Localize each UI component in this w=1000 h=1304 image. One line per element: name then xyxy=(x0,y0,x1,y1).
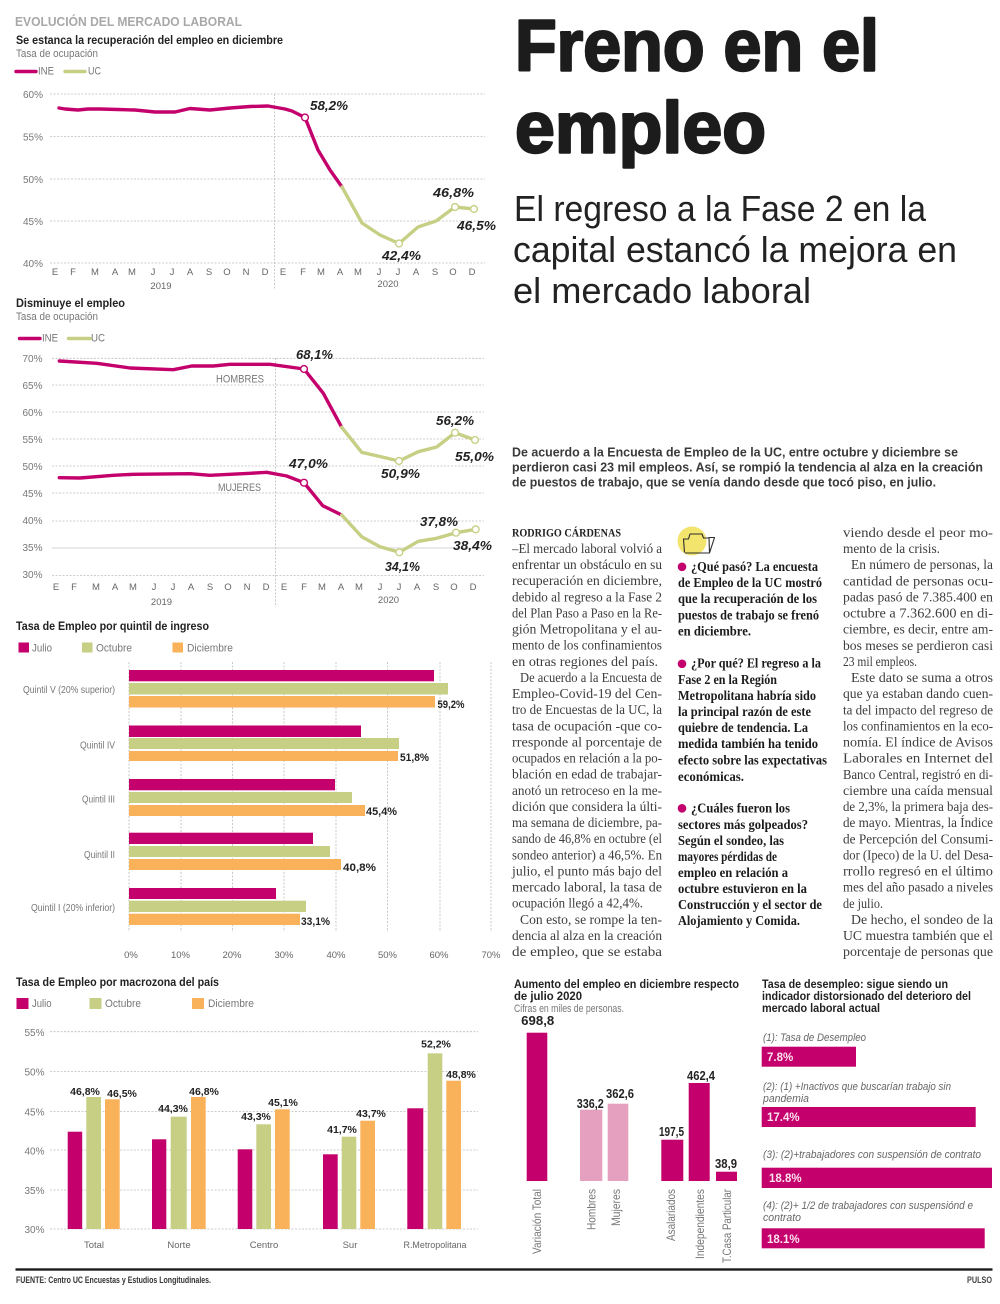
panel: line chart overall employment rate: A xyxy=(112,267,119,278)
key point: por qué: Metropolitana habría sido xyxy=(678,688,816,703)
panel: bar chart employment increase: Cifras en miles de personas. xyxy=(514,1003,624,1015)
lead paragraph xyxy=(512,444,983,490)
bar 1: (1): Tasa de Desempleo xyxy=(763,1032,866,1044)
legend xyxy=(18,642,233,654)
bars: total xyxy=(68,1086,138,1229)
panel: bar chart by macrozone: 55% xyxy=(24,1028,45,1039)
panel: line chart employment by gender: D xyxy=(263,582,270,593)
panel: line chart overall employment rate: J xyxy=(151,267,156,278)
text block: article column 1: sando de 46,8% en octubre (el xyxy=(512,831,662,846)
panel: line chart overall employment rate: A xyxy=(187,267,194,278)
panel: bar chart by income quintile: 10% xyxy=(171,950,191,961)
key point: por qué: económicas. xyxy=(678,769,744,784)
panel: line chart employment by gender: 2019 xyxy=(151,597,172,608)
panel: bar chart by macrozone: Centro xyxy=(250,1240,278,1251)
panel: line chart employment by gender: 65% xyxy=(22,381,43,392)
line: INE xyxy=(59,106,342,187)
panel: line chart employment by gender: M xyxy=(318,582,326,593)
bar: t. casa particular: 38,9 xyxy=(715,1157,737,1171)
panel: line chart employment by gender: F xyxy=(301,582,307,593)
panel: line chart employment by gender: A xyxy=(188,582,195,593)
text block: article column 3: padas pasó de 7.385.400 en xyxy=(843,590,993,604)
value markers: 50,9% xyxy=(381,466,420,481)
text block: article column 1: blación en edad de trabajar- xyxy=(512,767,662,782)
text block: article column 3: de julio. xyxy=(843,896,883,911)
panel: line chart employment by gender xyxy=(16,296,494,608)
legend xyxy=(16,998,254,1010)
bars: norte: 44,3% xyxy=(158,1103,189,1115)
panel: line chart employment by gender: 30% xyxy=(22,570,43,581)
panel: line chart overall employment rate: O xyxy=(223,267,231,278)
bar 4: contrato xyxy=(763,1212,801,1224)
bar: independientes: 462,4 xyxy=(687,1069,715,1083)
panel: line chart overall employment rate: F xyxy=(300,267,306,278)
text block: article column 3: En número de personas, la xyxy=(851,557,993,572)
value markers: 38,4% xyxy=(453,538,492,553)
bar: hombres: 336,2 xyxy=(577,1097,604,1111)
panel: bar chart by income quintile: 30% xyxy=(274,950,294,961)
legend: Octubre xyxy=(96,642,132,654)
line: hombres INE xyxy=(59,361,342,427)
panel: bar chart by macrozone: Total xyxy=(84,1240,104,1251)
panel: line chart employment by gender: J xyxy=(171,582,176,593)
panel: bar chart by income quintile: 0% xyxy=(124,950,138,961)
bars: sur: 43,7% xyxy=(356,1108,387,1120)
panel: line chart employment by gender: O xyxy=(450,582,458,593)
text block: article column 3: mes del año pasado a niveles xyxy=(843,880,993,895)
key point: por qué: Fase 2 en la Región xyxy=(678,672,777,687)
text block: article column 3: ta del impacto del regreso de xyxy=(843,702,993,717)
panel: bar chart by income quintile: 70% xyxy=(481,950,501,961)
line: UC xyxy=(342,187,474,244)
legend: Julio xyxy=(32,642,52,654)
bar 4: (4): (2)+ 1/2 de trabajadores con suspensiónd e xyxy=(763,1200,973,1212)
text block: article column 3 xyxy=(843,525,994,959)
legend: Octubre xyxy=(105,998,141,1010)
legend: INE xyxy=(38,66,54,78)
panel: line chart employment by gender: Disminuye el empleo xyxy=(16,296,125,310)
bars: R. Metropolitana: 48,8% xyxy=(446,1069,477,1081)
bar: variación total: Variación Total xyxy=(530,1189,544,1254)
source: FUENTE: Centro UC Encuestas y Estudios Longitudinales. xyxy=(16,1275,211,1285)
text block: article column 3: mento de la crisis. xyxy=(843,541,940,556)
key point: qué pasó: de Empleo de la UC mostró xyxy=(678,575,822,590)
panel: line chart employment by gender: 70% xyxy=(22,354,43,365)
text block: article column 3: cantidad de personas ocu- xyxy=(843,573,994,588)
text block: article column 3: viendo desde el peor mo- xyxy=(843,525,994,540)
bars: sur xyxy=(323,1108,387,1229)
value markers: 58,2% xyxy=(310,98,348,113)
text block: article column 3: de mayo. Mientras, la Índice xyxy=(843,815,993,830)
key point: cuáles fueron los sectores: Según el sondeo, las xyxy=(678,833,784,848)
bar: hombres: Hombres xyxy=(584,1189,598,1230)
panel: bar chart by macrozone: 45% xyxy=(24,1108,45,1118)
value markers: 37,8% xyxy=(420,514,458,529)
series labels: MUJERES xyxy=(218,482,261,494)
bars: quintil V: 59,2% xyxy=(438,699,465,711)
text block: article column 1: gión Metropolitana y el au- xyxy=(512,622,663,637)
legend: Julio xyxy=(32,998,52,1010)
panel: line chart overall employment rate: N xyxy=(243,267,250,278)
panel: bar chart by income quintile: Quintil I (20% inferior) xyxy=(31,903,115,914)
panel: unemployment rate: mercado laboral actual xyxy=(762,1001,880,1015)
key point: por qué: quiebre de tendencia. La xyxy=(678,720,808,735)
bars: total: 46,5% xyxy=(107,1088,138,1100)
bar 1: 7.8% xyxy=(767,1052,793,1064)
panel: bar chart by macrozone: Norte xyxy=(167,1240,191,1251)
bars: norte xyxy=(152,1086,220,1229)
key point: cuáles fueron los sectores xyxy=(678,800,822,928)
panel: line chart employment by gender: 40% xyxy=(22,516,43,527)
key point: cuáles fueron los sectores: empleo en relación a xyxy=(678,865,788,880)
key point: qué pasó: puestos de trabajo se frenó xyxy=(678,608,819,622)
value markers: 47,0% xyxy=(288,456,328,471)
bar: asalariados: Asalariados xyxy=(664,1189,678,1241)
text block: article column 1: debido al regreso a la Fase 2 xyxy=(512,589,662,604)
panel: unemployment rate: Tasa de desempleo: sigue siendo un xyxy=(762,977,948,991)
panel: line chart employment by gender: M xyxy=(92,582,100,593)
panel: line chart employment by gender: A xyxy=(414,582,421,593)
bars: quintil III xyxy=(129,779,397,818)
panel: line chart employment by gender: A xyxy=(338,582,345,593)
bars: centro xyxy=(238,1097,299,1229)
text block: article column 1: De acuerdo a la Encuesta de xyxy=(520,670,662,685)
panel: line chart employment by gender: E xyxy=(53,582,59,593)
text block: article column 3: que ya estaban dando cuen- xyxy=(843,686,994,701)
bar 2: (2): (1) +Inactivos que buscarían trabajo sin xyxy=(763,1081,951,1093)
text block: article column 3: rrollo regresó en el último xyxy=(843,864,993,878)
bars: R. Metropolitana xyxy=(407,1038,477,1229)
panel: line chart employment by gender: M xyxy=(129,582,137,593)
credit: PULSO xyxy=(967,1275,992,1285)
panel: bar chart by income quintile: 40% xyxy=(326,950,346,961)
key point: por qué: ¿Por qué? El regreso a la xyxy=(691,656,821,671)
text block: article column 3: Este dato se suma a otros xyxy=(851,670,993,685)
bars: sur: 41,7% xyxy=(327,1124,358,1136)
text block: article column 3: de Percepción del Consumi- xyxy=(843,831,993,846)
lead paragraph: De acuerdo a la Encuesta de Empleo de la UC, entre octubre y diciembre se xyxy=(512,444,958,460)
bars: quintil IV: 51,8% xyxy=(400,752,429,764)
legend xyxy=(20,332,105,344)
bars: quintil I: 33,1% xyxy=(301,916,330,928)
panel: line chart employment by gender: M xyxy=(355,582,363,593)
panel: bar chart by income quintile: Quintil III xyxy=(82,794,115,806)
legend: Diciembre xyxy=(208,998,254,1010)
key point: qué pasó: que la recuperación de los xyxy=(678,591,817,606)
panel: bar chart by macrozone: Tasa de Empleo por macrozona del país xyxy=(16,975,219,989)
key point: cuáles fueron los sectores: mayores pérdidas de xyxy=(678,849,777,864)
panel: line chart overall employment rate: F xyxy=(70,267,76,278)
value markers: 42,4% xyxy=(381,248,421,263)
lead paragraph: de puestos de trabajo, que se venía dando desde que tocó piso, en julio. xyxy=(512,474,936,490)
text block: article column 1: mercado laboral, la tasa de xyxy=(512,880,662,894)
text block: article column 1: del Plan Paso a Paso en la Re- xyxy=(512,606,662,620)
panel: line chart overall employment rate: Se estanca la recuperación del empleo en diciembre xyxy=(16,33,283,47)
panel: line chart employment by gender: 55% xyxy=(22,435,43,446)
panel: line chart overall employment rate: 60% xyxy=(23,90,43,101)
lead paragraph: perdieron casi 23 mil empleos. Así, se rompió la tendencia al alza en la creación xyxy=(512,460,983,474)
panel: bar chart by macrozone xyxy=(16,975,478,1251)
bars: quintil I xyxy=(129,888,330,928)
panel: line chart employment by gender: 50% xyxy=(22,462,43,473)
value markers: 34,1% xyxy=(385,559,420,574)
line: mujeres INE xyxy=(59,472,342,515)
bar: mujeres: 362,6 xyxy=(606,1087,634,1101)
panel: line chart overall employment rate: M xyxy=(91,267,99,278)
text block: article column 3: octubre a 7.362.600 en di- xyxy=(843,606,994,621)
panel: line chart employment by gender: A xyxy=(112,582,119,593)
bars: quintil II: 40,8% xyxy=(343,862,376,874)
panel: line chart overall employment rate: 55% xyxy=(23,132,43,144)
panel: line chart employment by gender: D xyxy=(470,582,477,593)
panel: line chart employment by gender: S xyxy=(207,582,213,593)
panel: line chart overall employment rate: D xyxy=(469,267,476,278)
text block: article column 3: Laborales en Internet del xyxy=(843,751,993,766)
text block: article column 3: de 2,3%, la primera baja des- xyxy=(843,799,993,814)
headline: Freno en el xyxy=(515,6,879,86)
panel: bar chart by macrozone: 30% xyxy=(24,1225,45,1236)
bar 2 xyxy=(762,1081,976,1127)
text block: article column 3: UC muestra también que el xyxy=(843,928,993,943)
text block: article column 1 xyxy=(511,541,663,959)
legend: Diciembre xyxy=(187,642,233,654)
panel: line chart employment by gender: N xyxy=(244,582,251,593)
panel: bar chart by income quintile: 50% xyxy=(378,950,398,961)
value markers xyxy=(302,98,496,263)
panel: line chart overall employment rate: 2019 xyxy=(150,281,172,292)
panel: line chart employment by gender: Tasa de ocupación xyxy=(16,311,98,323)
bars: total: 46,8% xyxy=(70,1086,101,1098)
key point: por qué xyxy=(678,656,827,784)
panel: line chart employment by gender: 35% xyxy=(22,543,43,554)
icon: yellow circle with folder xyxy=(678,526,714,556)
bar: mujeres: Mujeres xyxy=(609,1189,623,1226)
value markers: 68,1% xyxy=(296,347,333,362)
key point: qué pasó xyxy=(678,559,822,638)
bar: t. casa particular: T.Casa Particular xyxy=(720,1189,734,1263)
bar 1 xyxy=(762,1032,866,1067)
panel: line chart overall employment rate: E xyxy=(280,267,286,278)
text block: article column 3: los confinamientos en la eco- xyxy=(843,718,993,733)
bars: norte: 46,8% xyxy=(189,1086,220,1098)
panel: line chart overall employment rate: M xyxy=(354,267,362,278)
text block: article column 3: dor (Ipeco) de la U. del Desa- xyxy=(843,847,993,862)
text block: article column 3: porcentaje de personas que xyxy=(843,944,993,959)
bar: asalariados: 197,5 xyxy=(659,1125,684,1139)
panel: line chart overall employment rate: 40% xyxy=(23,259,43,270)
text block: article column 1: ma semana de diciembre, pa- xyxy=(512,815,662,830)
section label: evolución del mercado laboral: EVOLUCIÓN DEL MERCADO LABORAL xyxy=(15,14,242,29)
key point: cuáles fueron los sectores: ¿Cuáles fueron los xyxy=(691,800,790,816)
panel: bar chart by income quintile xyxy=(16,619,501,961)
panel: line chart overall employment rate: D xyxy=(262,267,269,278)
bar 3 xyxy=(762,1149,992,1188)
bar: hombres xyxy=(577,1097,604,1230)
bar 3: 18.8% xyxy=(769,1173,802,1185)
panel: bar chart by macrozone: 35% xyxy=(24,1186,45,1197)
key point: por qué: la principal razón de este xyxy=(678,704,811,719)
bars: centro: 45,1% xyxy=(268,1097,299,1109)
bar 4 xyxy=(762,1200,985,1248)
bar: variación total xyxy=(521,1014,554,1254)
panel: bar chart employment increase: de julio 2020 xyxy=(514,989,582,1003)
panel: line chart overall employment rate: E xyxy=(52,267,58,278)
panel: line chart overall employment rate: M xyxy=(317,267,325,278)
text block: article column 3: bos meses se perdieron casi xyxy=(843,638,993,653)
panel: bar chart by income quintile: Quintil V (20% superior) xyxy=(23,685,115,696)
bar: asalariados xyxy=(659,1125,684,1241)
panel: line chart overall employment rate: O xyxy=(449,267,457,278)
panel: line chart overall employment rate: A xyxy=(413,267,420,278)
key point: por qué: efecto sobre las expectativas xyxy=(678,752,827,768)
panel: line chart employment by gender: 45% xyxy=(22,489,43,500)
text block: article column 1: ocupación llegó a 42,4%. xyxy=(512,896,643,911)
panel: line chart overall employment rate: 50% xyxy=(23,175,43,186)
text block: article column 3: nomía. El índice de Avisos xyxy=(843,735,993,750)
text block: article column 1: de empleo, que se estaba xyxy=(512,944,662,959)
text block: article column 1: Con esto, se rompe la ten- xyxy=(520,912,663,927)
text block: article column 1: julio, el punto más bajo del xyxy=(511,863,662,878)
text block: article column 1: en otras regiones del país. xyxy=(512,654,658,669)
value markers: 56,2% xyxy=(436,413,474,428)
key point: por qué: medida también ha tenido xyxy=(678,736,818,751)
panel: line chart employment by gender: J xyxy=(378,582,383,593)
panel: bar chart by macrozone: R.Metropolitana xyxy=(404,1240,467,1251)
value markers xyxy=(288,347,494,574)
panel: line chart overall employment rate: M xyxy=(128,267,136,278)
headline: empleo xyxy=(515,88,766,168)
bars: R. Metropolitana: 52,2% xyxy=(421,1038,452,1050)
bar 2: 17.4% xyxy=(767,1112,800,1124)
panel: bar chart by macrozone: 40% xyxy=(24,1146,45,1158)
panel: bar chart by income quintile: Tasa de Empleo por quintil de ingreso xyxy=(16,619,209,633)
value markers: 46,5% xyxy=(456,218,496,233)
bars: centro: 43,3% xyxy=(241,1111,272,1123)
text block: article column 1: tro de Encuestas de la UC, la xyxy=(512,702,662,717)
text block: article column 1: –El mercado laboral volvió a xyxy=(511,541,662,556)
panel: line chart overall employment rate: S xyxy=(432,267,438,278)
panel: unemployment rate xyxy=(762,977,992,1248)
text block: article column 1: ocupados en relación a la po- xyxy=(512,751,662,766)
bar: t. casa particular xyxy=(715,1157,737,1263)
panel: line chart employment by gender: 60% xyxy=(22,408,43,419)
panel: line chart employment by gender: J xyxy=(397,582,402,593)
subheading: capital estancó la mejora en xyxy=(513,229,957,270)
bar 3: (3): (2)+trabajadores con suspensión de contrato xyxy=(763,1149,981,1161)
bar: independientes xyxy=(687,1069,715,1259)
bars: quintil III: 45,4% xyxy=(366,806,397,818)
text block: article column 1: dencia al alza en la creación xyxy=(512,928,662,943)
legend: UC xyxy=(91,332,105,344)
bar: independientes: Independientes xyxy=(693,1189,707,1259)
panel: bar chart employment increase xyxy=(514,977,739,1263)
text block: article column 1: tasa de ocupación -que co- xyxy=(512,718,663,733)
panel: line chart employment by gender: J xyxy=(152,582,157,593)
value markers: 55,0% xyxy=(455,449,494,464)
text block: article column 3: 23 mil empleos. xyxy=(843,654,917,669)
panel: line chart overall employment rate xyxy=(16,33,496,292)
bar: mujeres xyxy=(606,1087,634,1226)
text block: article column 1: anotó un retroceso en la me- xyxy=(512,783,662,798)
key point: cuáles fueron los sectores: sectores más golpeados? xyxy=(678,817,808,832)
headline xyxy=(515,6,879,168)
bar 2: pandemia xyxy=(762,1093,809,1105)
panel: bar chart by income quintile: 20% xyxy=(222,950,242,961)
subheading xyxy=(513,188,957,311)
panel: bar chart by macrozone: 50% xyxy=(24,1068,45,1078)
text block: article column 1: Empleo-Covid-19 del Cen- xyxy=(512,686,663,701)
text block: article column 1: mento de los confinamientos xyxy=(512,638,662,653)
subheading: el mercado laboral xyxy=(513,270,811,311)
panel: line chart overall employment rate: A xyxy=(337,267,344,278)
series labels xyxy=(216,374,264,494)
legend xyxy=(16,66,101,78)
key point: cuáles fueron los sectores: Alojamiento y Comida. xyxy=(678,913,800,928)
line: hombres UC xyxy=(342,427,475,461)
subheading: El regreso a la Fase 2 en la xyxy=(514,188,927,229)
panel: unemployment rate: indicador distorsionado del deterioro del xyxy=(762,989,971,1003)
bars: quintil IV xyxy=(129,726,429,764)
byline: RODRIGO CÁRDENAS xyxy=(512,526,621,540)
series labels: HOMBRES xyxy=(216,374,264,386)
bar 4: 18.1% xyxy=(767,1234,800,1246)
panel: line chart overall employment rate: J xyxy=(170,267,175,278)
bars: quintil V xyxy=(129,670,465,711)
legend: INE xyxy=(42,332,58,344)
text block: article column 1: enfrentar un obstáculo en su xyxy=(512,557,662,572)
text block: article column 3: ciembre, es decir, entre am- xyxy=(843,622,993,637)
panel: line chart overall employment rate: J xyxy=(377,267,382,278)
text block: article column 1: sondeo anterior) a 46,5%. En xyxy=(512,847,662,862)
text block: article column 1: rresponde al porcentaje de xyxy=(512,734,662,749)
panel: line chart employment by gender: S xyxy=(433,582,439,593)
text block: article column 1: dición que considera la últi- xyxy=(512,799,663,814)
key point: cuáles fueron los sectores: octubre estuvieron en la xyxy=(678,881,807,896)
value markers: 46,8% xyxy=(432,185,474,200)
panel: line chart overall employment rate: J xyxy=(396,267,401,278)
panel: line chart employment by gender: 2020 xyxy=(378,595,399,606)
line: mujeres UC xyxy=(342,515,476,552)
legend: UC xyxy=(88,66,101,78)
text block: article column 3: Banco Central, registró en di- xyxy=(843,767,993,782)
key point: qué pasó: ¿Qué pasó? La encuesta xyxy=(691,559,818,574)
panel: line chart overall employment rate: Tasa de ocupación xyxy=(16,48,98,60)
panel: bar chart employment increase: Aumento del empleo en diciembre respecto xyxy=(514,977,739,991)
panel: line chart employment by gender: F xyxy=(71,582,77,593)
panel: line chart employment by gender: O xyxy=(224,582,232,593)
panel: bar chart by income quintile: 60% xyxy=(429,950,449,961)
panel: line chart employment by gender: E xyxy=(281,582,287,593)
panel: line chart overall employment rate: S xyxy=(206,267,212,278)
panel: bar chart by macrozone: Sur xyxy=(343,1240,357,1251)
text block: article column 3: ciembre una caída mensual xyxy=(843,783,993,798)
bars: quintil II xyxy=(129,833,376,874)
text block: article column 3: De hecho, el sondeo de la xyxy=(851,912,993,927)
panel: bar chart by income quintile: Quintil IV xyxy=(80,740,115,752)
panel: line chart overall employment rate: 45% xyxy=(23,217,43,228)
key point: cuáles fueron los sectores: Construcción y el sector de xyxy=(678,897,822,912)
key point: qué pasó: en diciembre. xyxy=(678,624,751,638)
text block: article column 1: recuperación en diciembre, xyxy=(512,573,662,588)
panel: bar chart by income quintile: Quintil II xyxy=(84,850,115,861)
bar: variación total: 698,8 xyxy=(521,1014,554,1028)
panel: line chart overall employment rate: 2020 xyxy=(377,279,399,290)
